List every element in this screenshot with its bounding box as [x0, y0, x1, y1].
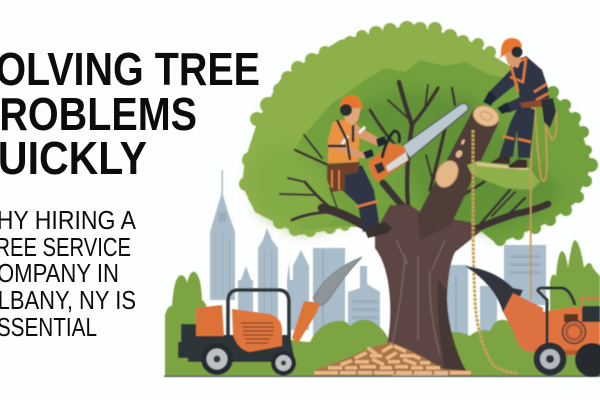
climber face: [503, 50, 521, 68]
city skyline: [210, 170, 546, 340]
left chipper large wheel: [201, 343, 233, 375]
right chipper axle: [535, 350, 600, 355]
chain: [473, 130, 518, 373]
right chipper roll bar: [538, 288, 575, 345]
arborist boot: [364, 222, 392, 238]
crown outer foliage: [239, 21, 592, 244]
climber torso: [516, 56, 550, 105]
climber gloves: [483, 91, 511, 114]
climber worker: [483, 38, 556, 168]
illustration: [164, 21, 600, 377]
foliage platform: [467, 161, 540, 190]
right wood chipper: [465, 266, 600, 377]
arborist legs: [342, 165, 380, 232]
left chipper rear housing: [196, 305, 224, 336]
chainsaw body: [368, 143, 409, 182]
chainsaw handle: [382, 131, 399, 158]
climber boots: [490, 156, 527, 168]
building details: [215, 212, 540, 335]
chainsaw: [368, 104, 468, 182]
right chipper flywheel: [562, 320, 586, 344]
climber harness: [502, 58, 549, 142]
arborist arms: [331, 124, 380, 158]
arborist harness: [328, 120, 353, 160]
arborist gloves: [363, 136, 387, 159]
left chipper blade: [313, 257, 362, 306]
bushes: [165, 240, 600, 376]
right chipper horn: [465, 266, 523, 312]
tree trunk: [375, 205, 480, 374]
left foliage patch: [250, 145, 340, 232]
wood chip pile: [313, 342, 472, 375]
ground line: [164, 376, 600, 377]
right chipper rear wheel: [575, 343, 600, 377]
arborist torso: [328, 118, 360, 163]
left chipper small wheel: [271, 350, 296, 376]
right chipper front wheel: [534, 342, 566, 376]
climber arms: [486, 60, 546, 113]
arborist with chainsaw: [327, 95, 468, 238]
left chipper hood: [232, 309, 282, 352]
right chipper body: [543, 307, 600, 352]
left chipper chute: [292, 301, 320, 343]
cut limb: [418, 103, 501, 240]
left chipper roll bar: [228, 290, 289, 342]
subtitle: [0, 205, 137, 342]
arborist face: [343, 108, 361, 126]
left chipper wheel arch: [194, 336, 242, 362]
rope: [531, 105, 556, 300]
arborist helmet: [340, 95, 363, 108]
climber helmet: [497, 38, 522, 60]
left wood chipper: [178, 257, 362, 376]
right chipper hopper: [503, 293, 543, 352]
left chipper base: [178, 335, 295, 362]
right chipper engine cover: [582, 306, 600, 322]
crown inner foliage: [285, 60, 598, 246]
crown darker shade: [340, 90, 565, 232]
climber legs: [499, 103, 535, 158]
arborist tool belt: [327, 162, 360, 192]
climber tool pouch: [541, 98, 556, 128]
title: [0, 43, 260, 184]
tree crown: [239, 21, 598, 246]
right chipper frame: [582, 298, 600, 307]
tree branches: [280, 82, 548, 238]
chainsaw bar: [402, 104, 468, 158]
